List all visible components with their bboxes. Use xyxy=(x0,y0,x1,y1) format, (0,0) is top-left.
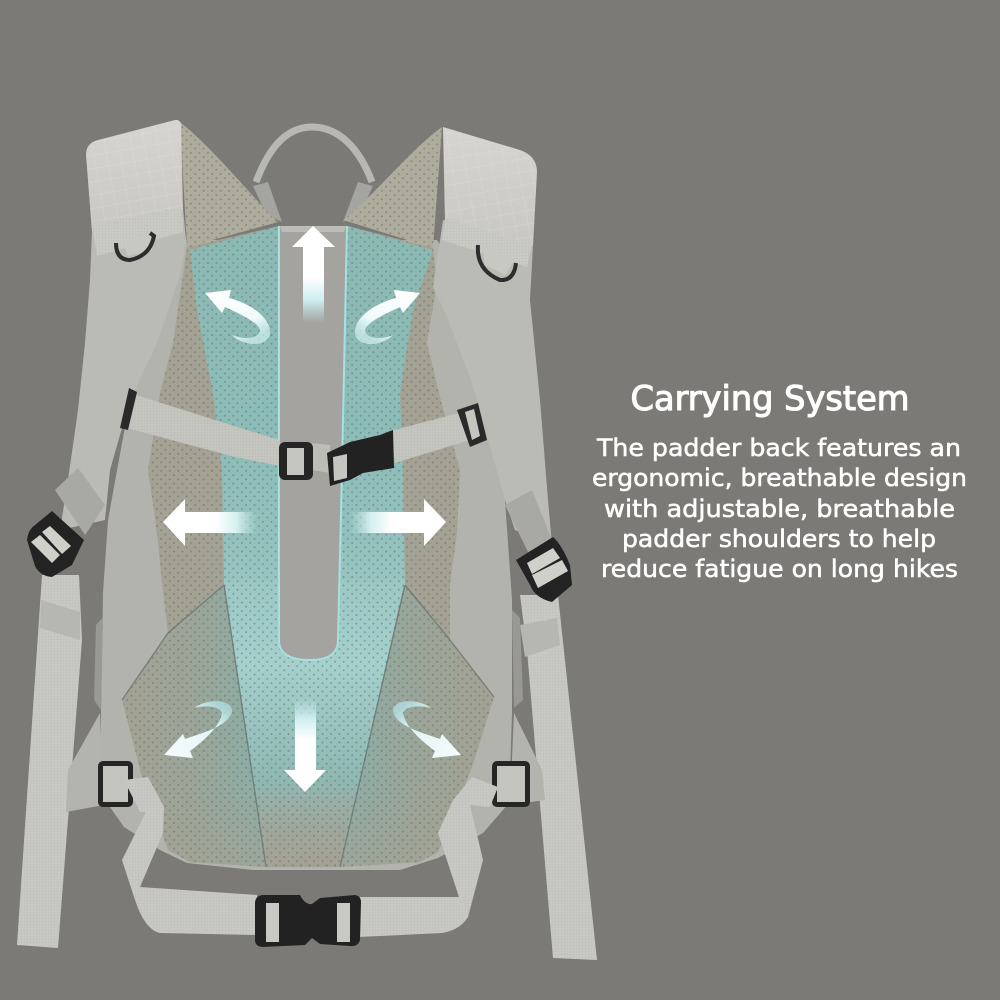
sternum buckle xyxy=(327,430,394,486)
arrow: curved lower right xyxy=(393,701,461,758)
teal upper-right panel xyxy=(338,226,433,640)
body text: padder shoulders to help xyxy=(622,525,936,553)
arrow: down xyxy=(284,697,326,792)
teal upper-left panel xyxy=(190,226,279,640)
body text: The padder back features an xyxy=(596,434,961,462)
body text: with adjustable, breathable xyxy=(604,495,955,523)
waist buckle xyxy=(255,895,361,947)
sternum strap xyxy=(120,388,487,486)
buckle slot xyxy=(333,454,347,481)
side mesh pocket left xyxy=(94,617,103,710)
strap tab right xyxy=(505,490,552,552)
left ladder buckle xyxy=(27,511,84,577)
right hanging strap xyxy=(520,595,597,960)
heading: Carrying System xyxy=(630,379,910,419)
lower left slider xyxy=(98,761,133,807)
lower side wings xyxy=(66,713,545,812)
backpack illustration xyxy=(17,120,597,960)
right strap webbing band xyxy=(442,218,532,267)
left shoulder strap xyxy=(60,120,186,530)
pack body side panels xyxy=(101,240,512,870)
left yoke mesh xyxy=(180,122,278,247)
teal lower-right panel xyxy=(340,585,494,867)
strap tab left xyxy=(55,468,105,535)
airflow arrows xyxy=(163,226,461,792)
arrow: curved lower left xyxy=(164,701,232,758)
lower right slider xyxy=(492,761,530,807)
top carry handle xyxy=(253,127,373,222)
left hanging strap xyxy=(17,575,82,948)
right ladder buckle xyxy=(516,537,572,602)
body text: reduce fatigue on long hikes xyxy=(601,555,958,583)
arrow: curved upper left xyxy=(205,290,270,344)
side mesh pocket right xyxy=(512,610,523,708)
arrow: curved upper right xyxy=(355,290,420,344)
teal lower-left panel xyxy=(122,585,266,867)
mesh dots xyxy=(122,226,494,867)
left strap webbing band xyxy=(92,207,183,256)
sternum slider xyxy=(279,442,313,480)
teal lower-center panel xyxy=(224,580,405,867)
sternum anchor left xyxy=(120,388,137,430)
arrow: right xyxy=(350,499,446,546)
right shoulder strap xyxy=(433,127,552,545)
centre spine channel xyxy=(279,226,347,660)
arrow: left xyxy=(163,499,258,546)
right yoke mesh xyxy=(343,127,442,248)
left D-ring xyxy=(116,232,154,260)
mesh back panel xyxy=(122,226,494,867)
right D-ring xyxy=(478,245,516,280)
panel seams xyxy=(122,585,494,867)
waist belt xyxy=(122,777,498,947)
body text xyxy=(592,434,967,583)
bottom fade xyxy=(122,697,494,867)
yoke dots xyxy=(180,122,442,248)
sternum anchor right xyxy=(457,403,487,447)
body text: ergonomic, breathable design xyxy=(592,464,967,492)
arrow: up xyxy=(292,226,335,323)
